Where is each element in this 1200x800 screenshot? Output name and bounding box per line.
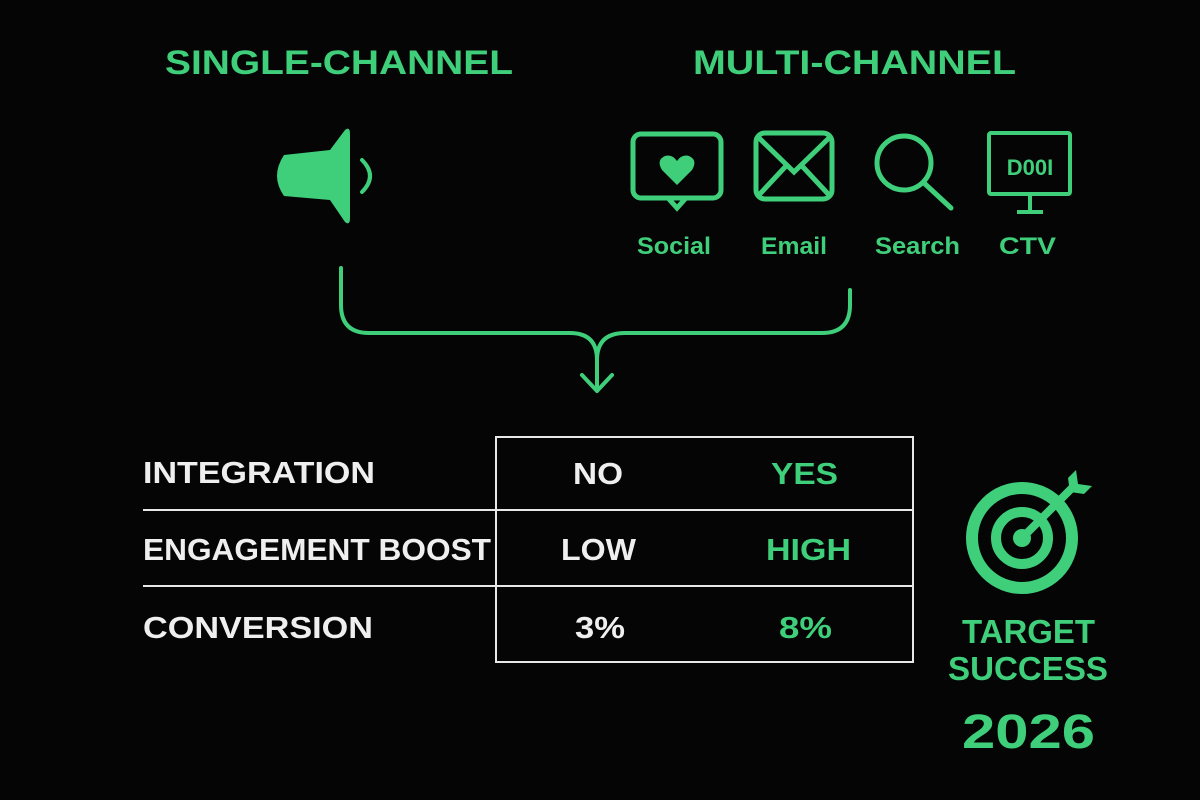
comparison table [143, 437, 913, 662]
channel labels: Email [761, 233, 827, 260]
comparison table: 3% [575, 610, 625, 645]
icon: target [972, 470, 1092, 588]
channel labels: Search [875, 233, 960, 260]
comparison table: HIGH [766, 532, 851, 567]
comparison table: CONVERSION [143, 610, 373, 645]
channel labels [637, 233, 1056, 260]
heading: single-channel: SINGLE-CHANNEL [165, 44, 513, 82]
comparison table: YES [771, 456, 838, 491]
heading: multi-channel: MULTI-CHANNEL [693, 44, 1016, 82]
icon: search [877, 136, 951, 208]
comparison table: NO [573, 456, 623, 491]
icon: CTV [989, 133, 1070, 212]
target text: TARGET [962, 613, 1095, 650]
icon: email [756, 133, 832, 199]
comparison table: LOW [561, 532, 637, 567]
arrow: merging connector [341, 268, 850, 391]
icon: megaphone [277, 129, 370, 223]
icon: CTV: D00I [1007, 155, 1053, 180]
comparison table: ENGAGEMENT BOOST [143, 532, 491, 567]
target text: 2026 [962, 706, 1095, 759]
target text [948, 613, 1108, 759]
icon: social [633, 134, 721, 208]
comparison table: INTEGRATION [143, 455, 375, 490]
comparison table: 8% [779, 610, 832, 645]
channel labels: CTV [999, 233, 1056, 260]
channel labels: Social [637, 233, 711, 260]
target text: SUCCESS [948, 650, 1108, 687]
